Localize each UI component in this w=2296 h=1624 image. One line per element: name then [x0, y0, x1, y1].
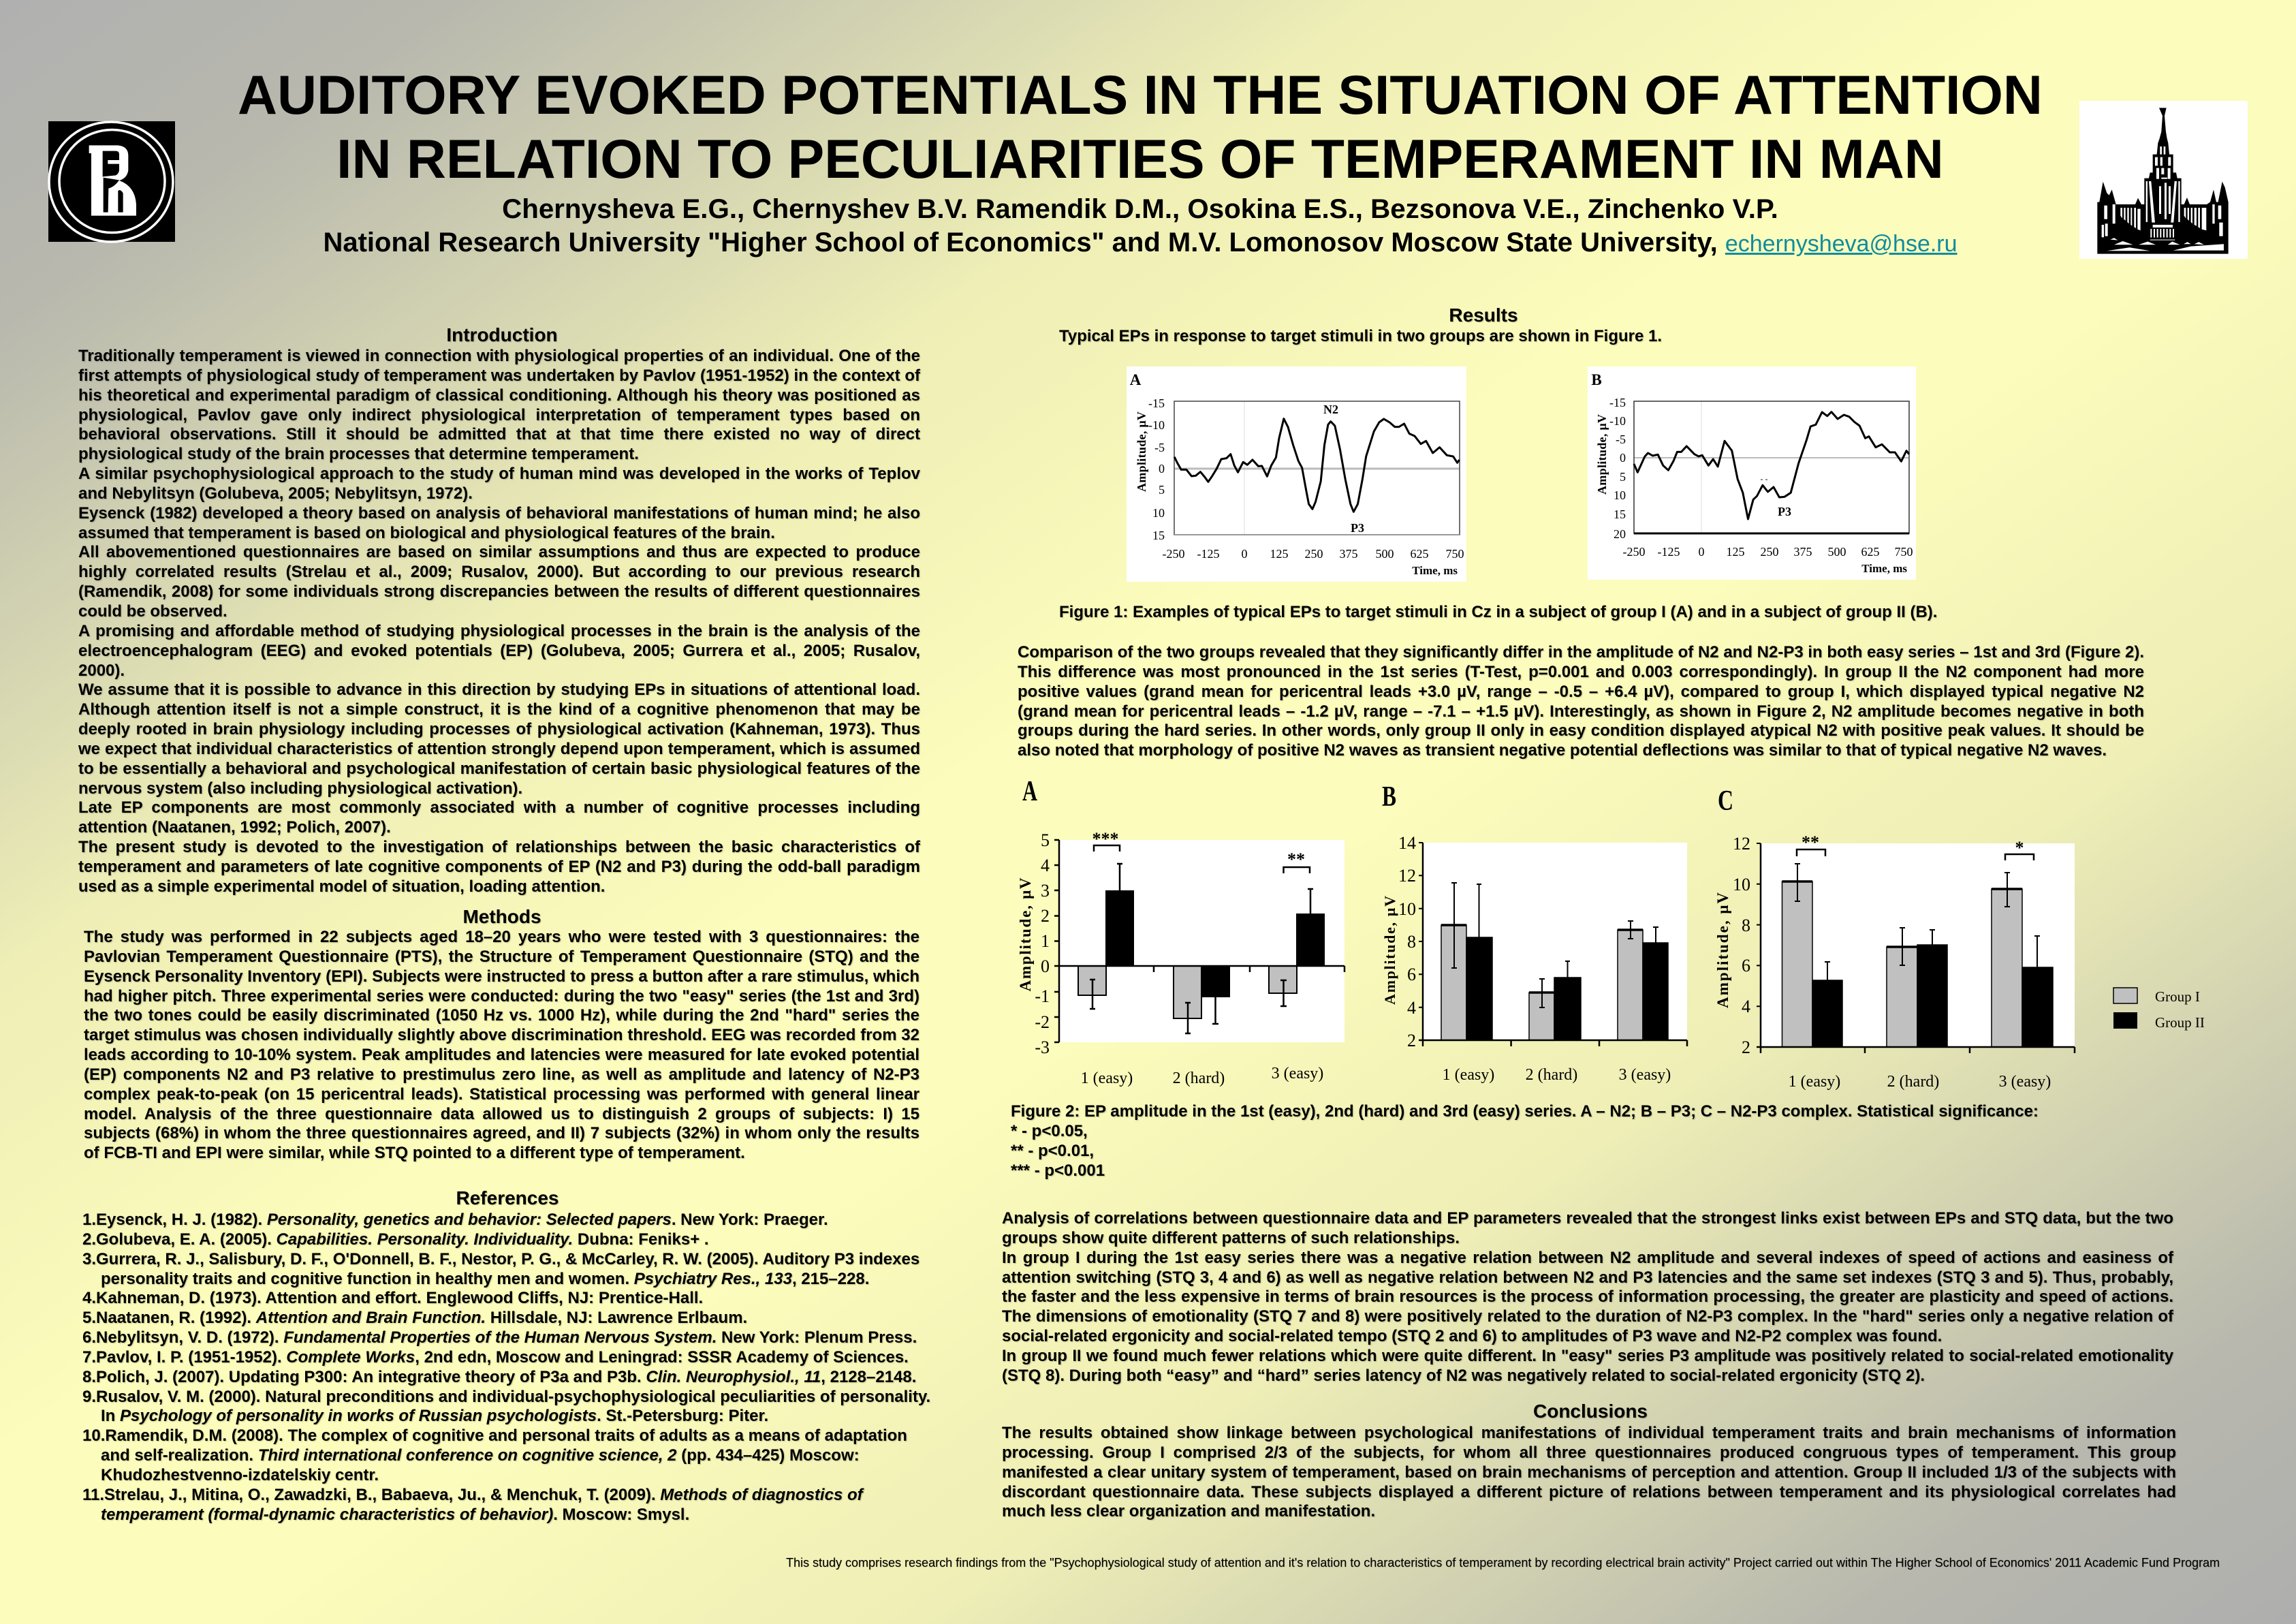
- text: introduction: [78, 347, 922, 896]
- figure 1 chart B: evoked potential waveform: [1588, 366, 1916, 580]
- text: introduction: A similar psychophysiological approach to the study of human mind was developed in the works of Teplov: [78, 465, 920, 483]
- chart B labels: -15: [1609, 396, 1626, 409]
- chart A labels: -250: [1162, 547, 1185, 561]
- chart C labels: Amplitude, μV: [1714, 892, 1731, 1008]
- figure 2 chart A: N2 bar chart: A: [1022, 776, 1037, 807]
- heading: Conclusions: Conclusions: [1533, 1401, 1648, 1422]
- text: correlation analysis: groups show quite different patterns of such relationships.: [1002, 1229, 1460, 1247]
- text: methods: The study was performed in 22 subjects aged 18–20 years who were tested with 3 questionnaires: the: [84, 928, 919, 946]
- text: comparison of groups: positive values (grand mean for pericentral leads +3.0 µV, range – -0.5 – +6.4 µV), compared to group I, which displayed typical negative N2: [1018, 683, 2144, 701]
- figure 2 chart B: P3 bar chart: [1381, 781, 1687, 1084]
- chart A labels: 3: [1041, 881, 1050, 901]
- text: methods: Eysenck Personality Inventory (EPI). Subjects were instructed to press a button after a rare stimulus, which: [84, 967, 919, 986]
- text: correlation analysis: Analysis of correlations between questionnaire data and EP parameters revealed that the strongest links exist between EPs and STQ data, but the two: [1002, 1209, 2173, 1228]
- text: methods: had higher pitch. Three experimental series were conducted: during the two "easy" series (the 1st and 3rd): [84, 987, 919, 1005]
- chart C bars: [1782, 881, 2053, 1047]
- waveform B: [1634, 412, 1909, 519]
- text: conclusions: much less clear organization and manifestation.: [1002, 1502, 1375, 1520]
- icon: Moscow State University building logo: [2079, 101, 2248, 259]
- text: correlation analysis: social-related ergonicity and social-related tempo (STQ 2 and 6) to amplitudes of P3 wave and N2-P2 complex was found.: [1002, 1327, 1942, 1345]
- text: references list: 5.Naatanen, R. (1992). Attention and Brain Function. Hillsdale, NJ: Lawrence Erlbaum.: [82, 1309, 747, 1327]
- text: results intro: Typical EPs in response to target stimuli in two groups are shown in Figure 1.: [1059, 327, 1662, 345]
- text: correlation analysis: In group II we found much fewer relations which were quite different. In "easy" series P3 amplitude was positively related to social-related emotionality: [1002, 1347, 2173, 1365]
- chart B labels: 500: [1828, 545, 1846, 559]
- text: correlation analysis: The dimensions of emotionality (STQ 7 and 8) were positively related to the duration of N2-P3 complex. In the "hard" series only a negative relation of: [1002, 1307, 2173, 1326]
- legend: [2113, 988, 2205, 1031]
- chart B labels: -10: [1609, 414, 1626, 428]
- figure 2 chart C: N2-P3 bar chart with legend: [1714, 785, 2205, 1091]
- chart A labels: 500: [1376, 547, 1394, 561]
- chart B labels: 5: [1620, 470, 1626, 484]
- chart A labels: N2: [1323, 403, 1338, 416]
- caption: figure 2: Figure 2: EP amplitude in the 1st (easy), 2nd (hard) and 3rd (easy) series. A – N2; B – P3; C – N2-P3 complex. Statistical significance:: [1011, 1102, 2039, 1121]
- chart A labels: 5: [1159, 483, 1165, 497]
- footer: funding note: This study comprises research findings from the "Psychophysiological study of attention and it's relation to characteristics of temperament by recording electrical brain activity" Project carried out within The Higher School of Economics' 2011 Academic Fund Program: [786, 1556, 2220, 1570]
- heading: References: References: [456, 1187, 559, 1208]
- text: introduction: Eysenck (1982) developed a theory based on analysis of behavioral manifestations of human mind; he also: [78, 504, 920, 522]
- text: introduction: attention (Naatanen, 1992; Polich, 2007).: [78, 818, 391, 837]
- text: methods: subjects (68%) in whom the three questionnaires agreed, and II) 7 subjects (32%) in whom only the results: [84, 1124, 919, 1142]
- chart C labels: *: [2015, 838, 2024, 858]
- chart B labels: 14: [1398, 833, 1416, 853]
- chart B labels: 3 (easy): [1619, 1066, 1671, 1084]
- chart A labels: 1 (easy): [1081, 1069, 1133, 1087]
- caption: figure 2: * - p<0.05,: [1011, 1122, 1088, 1140]
- text: methods: the two tones could be easily discriminated (1050 Hz vs. 1000 Hz), while during the 2nd "hard" series the: [84, 1006, 919, 1025]
- text: comparison of groups: This difference was most pronounced in the 1st series (T-Test, p=0.001 and 0.003 correspondingly). In group II the N2 component had more: [1018, 663, 2144, 681]
- chart A labels: 5: [1041, 830, 1050, 850]
- text: introduction: could be observed.: [78, 602, 227, 621]
- text: introduction: first attempts of physiological study of temperament was undertaken by Pavlov (1951-1952) in the context of: [78, 366, 920, 385]
- text: references list: [82, 1211, 930, 1525]
- chart B labels: -125: [1658, 545, 1680, 559]
- chart A labels: -1: [1035, 986, 1050, 1006]
- title: IN RELATION TO PECULIARITIES OF TEMPERAMENT IN MAN: [336, 129, 1944, 190]
- text: introduction: Late EP components are most commonly associated with a number of cognitive processes including: [78, 798, 920, 817]
- text: introduction: 2000).: [78, 661, 125, 680]
- text: introduction: highly correlated results (Strelau et al., 2009; Rusalov, 2000). But according to our previous research: [78, 563, 920, 581]
- text: introduction: temperament and parameters of late cognitive components of EP (N2 and P3) during the odd-ball paradigm: [78, 858, 920, 876]
- chart B labels: Amplitude, μV: [1595, 414, 1609, 495]
- text: conclusions: The results obtained show linkage between psychological manifestations of individual temperament traits and brain mechanisms of information: [1002, 1424, 2176, 1442]
- chart B labels: 4: [1407, 998, 1416, 1018]
- caption: figure 2: ** - p<0.01,: [1011, 1142, 1094, 1160]
- chart A axes and error bars: [1054, 840, 1344, 1042]
- chart A labels: -10: [1148, 418, 1165, 432]
- text: references list: 7.Pavlov, I. P. (1951-1952). Complete Works, 2nd edn, Moscow and Leningrad: SSSR Academy of Sciences.: [82, 1348, 909, 1367]
- text: conclusions: processing. Group I comprised 2/3 of the subjects, for whom all three questionnaires produced congruous types of temperament. This group: [1002, 1443, 2176, 1462]
- caption: figure 2: *** - p<0.001: [1011, 1161, 1105, 1180]
- text: references list: 9.Rusalov, V. M. (2000). Natural preconditions and individual-psychophysiological peculiarities of personality.: [82, 1388, 930, 1406]
- caption: figure 1: Figure 1: Examples of typical EPs to target stimuli in Cz in a subject of group I (A) and in a subject of group II (B).: [1059, 603, 1937, 621]
- chart B labels: Time, ms: [1861, 562, 1907, 575]
- text: comparison of groups: also noted that morphology of positive N2 waves as transient negative potential deflections was similar to that of typical negative N2 waves.: [1018, 741, 2107, 760]
- chart B labels: 10: [1614, 488, 1626, 502]
- text: references list: 3.Gurrera, R. J., Salisbury, D. F., O'Donnell, B. F., Nestor, P. G., & McCarley, R. W. (2005). Auditory P3 indexes: [82, 1250, 919, 1268]
- heading: Methods: Methods: [462, 906, 541, 927]
- title: [238, 65, 2043, 190]
- chart A labels: P3: [1351, 521, 1364, 535]
- text: introduction: physiological, Pavlov gave only indirect physiological interpretation of temperament types based on: [78, 406, 920, 424]
- chart C labels: [1714, 832, 2051, 1091]
- text: methods: of FCB-TI and EPI were similar, while STQ pointed to a different type of temperament.: [84, 1144, 745, 1162]
- text: introduction: physiological study of the brain processes that determine temperament.: [78, 445, 639, 463]
- text: references list: 8.Polich, J. (2007). Updating P300: An integrative theory of P3a and P3b. Clin. Neurophysiol., 11, 2128–2148.: [82, 1368, 916, 1386]
- text: comparison of groups: groups during the hard series. In other words, only group II only in easy condition displayed atypical N2 with positive peak values. It should be: [1018, 721, 2144, 740]
- figure 2 chart A: N2 bar chart: [1017, 776, 1344, 1087]
- text: correlation analysis: the faster and the less expensive in terms of brain resources is the process of information processing, the greater are plasticity and speed of actions.: [1002, 1287, 2173, 1306]
- affiliation and email: National Research University "Higher School of Economics" and M.V. Lomonosov Moscow State University, echernysheva@hse.ru: [323, 228, 1957, 257]
- chart B labels: 2: [1407, 1031, 1416, 1050]
- text: references list: 1.Eysenck, H. J. (1982). Personality, genetics and behavior: Selected papers. New York: Praeger.: [82, 1211, 828, 1229]
- text: correlation analysis: (STQ 8). During both “easy” and “hard” series latency of N2 was negatively related to social-related ergonicity (STQ 2).: [1002, 1367, 1925, 1385]
- title: AUDITORY EVOKED POTENTIALS IN THE SITUATION OF ATTENTION: [238, 65, 2043, 126]
- text: comparison of groups: (grand mean for pericentral leads – -1.2 µV, range – -7.1 – +1.5 µV). Interestingly, as shown in Figure 2, N2 amplitude becomes negative in both: [1018, 702, 2144, 721]
- chart B labels: B: [1591, 371, 1602, 388]
- chart A labels: -2: [1035, 1012, 1050, 1032]
- chart A labels: 750: [1445, 547, 1464, 561]
- chart B bars: [1441, 925, 1668, 1040]
- authors: Chernysheva E.G., Chernyshev B.V. Ramendik D.M., Osokina E.S., Bezsonova V.E., Zinchenko V.P.: [502, 193, 1778, 224]
- text: introduction: The present study is devoted to the investigation of relationships between the basic characteristics of: [78, 838, 920, 856]
- text: introduction: electroencephalogram (EEG) and evoked potentials (EP) (Golubeva, 2005; Gurrera et al., 2005; Rusalov,: [78, 642, 920, 660]
- chart A labels: Amplitude, μV: [1135, 411, 1148, 492]
- text: comparison of groups: Comparison of the two groups revealed that they significantly differ in the amplitude of N2 and N2-P3 in both easy series – 1st and 3rd (Figure 2).: [1018, 643, 2144, 661]
- text: introduction: nervous system (also including physiological activation).: [78, 779, 522, 798]
- text: introduction: and Nebylitsyn (Golubeva, 2005; Nebylitsyn, 1972).: [78, 484, 473, 503]
- chart A labels: A: [1130, 371, 1142, 388]
- text: correlation analysis: [1002, 1209, 2174, 1386]
- text: introduction: A promising and affordable method of studying physiological processes in the brain is the analysis of the: [78, 622, 920, 640]
- chart B labels: 0: [1699, 545, 1704, 559]
- text: introduction: his theoretical and experimental paradigm of classical conditioning. Although his theory was positioned as: [78, 386, 920, 405]
- chart B labels: Amplitude, μV: [1381, 896, 1398, 1005]
- caption: figure 2: [1011, 1102, 2039, 1180]
- heading: Results: Results: [1449, 304, 1518, 326]
- text: introduction: assumed that temperament is based on biological and physiological features of the brain.: [78, 524, 775, 542]
- text: correlation analysis: attention switching (STQ 3, 4 and 6) as well as negative relation between N2 and P3 latencies and the same set indexes (STQ 3 and 5). Thus, probably,: [1002, 1268, 2173, 1287]
- text: introduction: to be essentially a behavioral and psychological manifestation of certain basic physiological features of the: [78, 760, 920, 778]
- text: references list: In Psychology of personality in works of Russian psychologists. St.-Petersburg: Piter.: [101, 1407, 768, 1425]
- text: correlation analysis: In group I during the 1st easy series there was a negative relation between N2 amplitude and several indexes of speed of actions and easiness of: [1002, 1249, 2173, 1267]
- chart A labels: 625: [1410, 547, 1429, 561]
- chart C labels: 1 (easy): [1789, 1073, 1840, 1091]
- waveform A: [1174, 419, 1460, 512]
- text: introduction: (Ramendik, 2008) for some individuals strong discrepancies between the results of different questionnaires: [78, 582, 920, 601]
- text: methods: Pavlovian Temperament Questionnaire (PTS), the Structure of Temperament Questionnaire (STQ) and the: [84, 948, 919, 966]
- chart B labels: 6: [1407, 965, 1416, 984]
- text: references list: and self-realization. Third international conference on cognitive science, 2 (pp. 434–425) Moscow:: [101, 1446, 860, 1465]
- chart B labels: 15: [1614, 507, 1626, 521]
- chart C labels: 3 (easy): [1999, 1073, 2051, 1091]
- chart A labels: 1: [1041, 931, 1050, 951]
- chart C axes and error bars: [1757, 843, 2075, 1053]
- chart B labels: 20: [1614, 527, 1626, 541]
- text: introduction: we expect that individual characteristics of attention strongly depend upon temperament, which is assumed: [78, 740, 920, 758]
- chart A labels: 4: [1041, 856, 1050, 875]
- chart B axes and error bars: [1419, 843, 1687, 1046]
- chart A labels: **: [1287, 849, 1305, 869]
- chart A labels: 375: [1339, 547, 1358, 561]
- chart B labels: - -: [1760, 474, 1768, 484]
- figure 1 chart A: evoked potential waveform: [1127, 366, 1466, 582]
- chart C labels: 12: [1733, 834, 1750, 854]
- icon: HSE logo: [48, 121, 175, 242]
- chart B labels: [1381, 833, 1671, 1084]
- text: references list: 2.Golubeva, E. A. (2005). Capabilities. Personality. Individuality. Dubna: Feniks+ .: [82, 1230, 709, 1249]
- chart A labels: 15: [1152, 529, 1165, 542]
- chart B labels: 2 (hard): [1526, 1066, 1577, 1084]
- heading: Introduction: Introduction: [446, 324, 558, 345]
- text: methods: target stimulus was chosen individually slightly above discrimination threshold. EEG was recorded from 32: [84, 1026, 919, 1044]
- chart A labels: 0: [1041, 956, 1050, 976]
- chart A labels: -3: [1035, 1037, 1050, 1057]
- chart C labels: **: [1802, 832, 1819, 852]
- chart C labels: 10: [1733, 875, 1750, 894]
- chart A labels: 0: [1241, 547, 1248, 561]
- figure 2 chart C: N2-P3 bar chart with legend: C: [1718, 785, 1733, 817]
- chart B labels: 12: [1398, 866, 1416, 886]
- text: conclusions: manifested a clear unitary system of temperament, based on brain mechanisms of perception and attention. Group II included 1/3 of the subjects with: [1002, 1463, 2176, 1482]
- chart C labels: 4: [1742, 997, 1750, 1016]
- text: references list: Khudozhestvenno-izdatelskiy centr.: [101, 1466, 379, 1484]
- chart A labels: -125: [1197, 547, 1219, 561]
- chart B labels: 375: [1794, 545, 1812, 559]
- chart A labels: 10: [1152, 506, 1165, 520]
- legend: Group II: [2155, 1014, 2205, 1031]
- text: references list: 6.Nebylitsyn, V. D. (1972). Fundamental Properties of the Human Nervous System. New York: Plenum Press.: [82, 1328, 917, 1347]
- text: comparison of groups: [1018, 643, 2145, 760]
- text: methods: leads according to 10-10% system. Peak amplitudes and latencies were measured for late evoked potential: [84, 1046, 919, 1064]
- text: methods: [84, 928, 921, 1162]
- chart C labels: 8: [1742, 916, 1750, 935]
- text: conclusions: [1002, 1424, 2177, 1520]
- chart A labels: 125: [1270, 547, 1289, 561]
- chart A bars: [1078, 891, 1324, 1018]
- text: introduction: Although attention itself is not a simple construct, it is the kind of a cognitive phenomenon that may be: [78, 700, 920, 719]
- chart B labels: P3: [1778, 505, 1791, 518]
- chart A labels: -5: [1154, 441, 1165, 454]
- text: references list: 11.Strelau, J., Mitina, O., Zawadzki, B., Babaeva, Ju., & Menchuk, T. (2009). Methods of diagnostics of: [82, 1486, 863, 1504]
- chart A labels: [1017, 829, 1323, 1087]
- chart B labels: 1 (easy): [1443, 1066, 1494, 1084]
- chart B labels: 8: [1407, 932, 1416, 952]
- chart B labels: 750: [1895, 545, 1913, 559]
- text: references list: temperament (formal-dynamic characteristics of behavior). Moscow: Smysl.: [101, 1505, 689, 1524]
- text: conclusions: discordant questionnaire data. These subjects displayed a different picture of relations between temperament and its physiological correlates had: [1002, 1483, 2176, 1501]
- text: introduction: used as a simple experimental model of situation, loading attention.: [78, 877, 605, 896]
- chart C labels: 2 (hard): [1887, 1073, 1939, 1091]
- chart B labels: 625: [1861, 545, 1880, 559]
- text: introduction: We assume that it is possible to advance in this direction by studying EPs in situations of attentional load.: [78, 681, 920, 699]
- text: methods: model. Analysis of the three questionnaire data allowed us to distinguish 2 groups of subjects: I) 15: [84, 1105, 919, 1123]
- chart A labels: -15: [1148, 396, 1165, 410]
- chart B labels: 125: [1726, 545, 1745, 559]
- text: references list: 10.Ramendik, D.M. (2008). The complex of cognitive and personal traits of adults as a means of adaptation: [82, 1426, 907, 1445]
- chart A labels: 2 (hard): [1173, 1069, 1225, 1087]
- chart B labels: [1591, 371, 1913, 575]
- chart B labels: -5: [1616, 433, 1626, 446]
- text: introduction: deeply rooted in brain physiology including processes of physiological activation (Kahneman, 1973). Thus: [78, 720, 920, 738]
- text: introduction: behavioral observations. Still it should be admitted that at that time there existed no way of direct: [78, 425, 920, 443]
- chart B labels: 250: [1760, 545, 1779, 559]
- chart A labels: 0: [1159, 462, 1165, 475]
- figure 2 chart B: P3 bar chart: B: [1382, 781, 1396, 813]
- chart A labels: Amplitude, μV: [1017, 877, 1034, 992]
- chart A labels: 2: [1041, 906, 1050, 926]
- chart A labels: [1130, 371, 1464, 577]
- text: introduction: Traditionally temperament is viewed in connection with physiological properties of an individual. One of the: [78, 347, 920, 365]
- text: methods: (EP) components N2 and P3 relative to prestimulus zero line, as well as amplitude and latency of N2-P3: [84, 1065, 919, 1084]
- chart A labels: 3 (easy): [1272, 1065, 1323, 1082]
- chart C labels: 6: [1742, 956, 1750, 975]
- chart B labels: 0: [1620, 451, 1626, 465]
- text: references list: 4.Kahneman, D. (1973). Attention and effort. Englewood Cliffs, NJ: Prentice-Hall.: [82, 1289, 703, 1307]
- chart B labels: 10: [1398, 899, 1416, 919]
- chart B labels: -250: [1622, 545, 1646, 559]
- text: introduction: All abovementioned questionnaires are based on similar assumptions and thus are expected to produce: [78, 543, 920, 561]
- text: references list: personality traits and cognitive function in healthy men and women. Psychiatry Res., 133, 215–228.: [101, 1270, 869, 1288]
- chart A labels: ***: [1092, 829, 1118, 849]
- chart C labels: 2: [1742, 1037, 1750, 1057]
- text: methods: complex peak-to-peak (on 15 pericentral leads). Statistical processing was performed with general linear: [84, 1085, 919, 1104]
- chart A labels: 250: [1305, 547, 1323, 561]
- chart A labels: Time, ms: [1412, 564, 1458, 577]
- legend: Group I: [2155, 988, 2200, 1005]
